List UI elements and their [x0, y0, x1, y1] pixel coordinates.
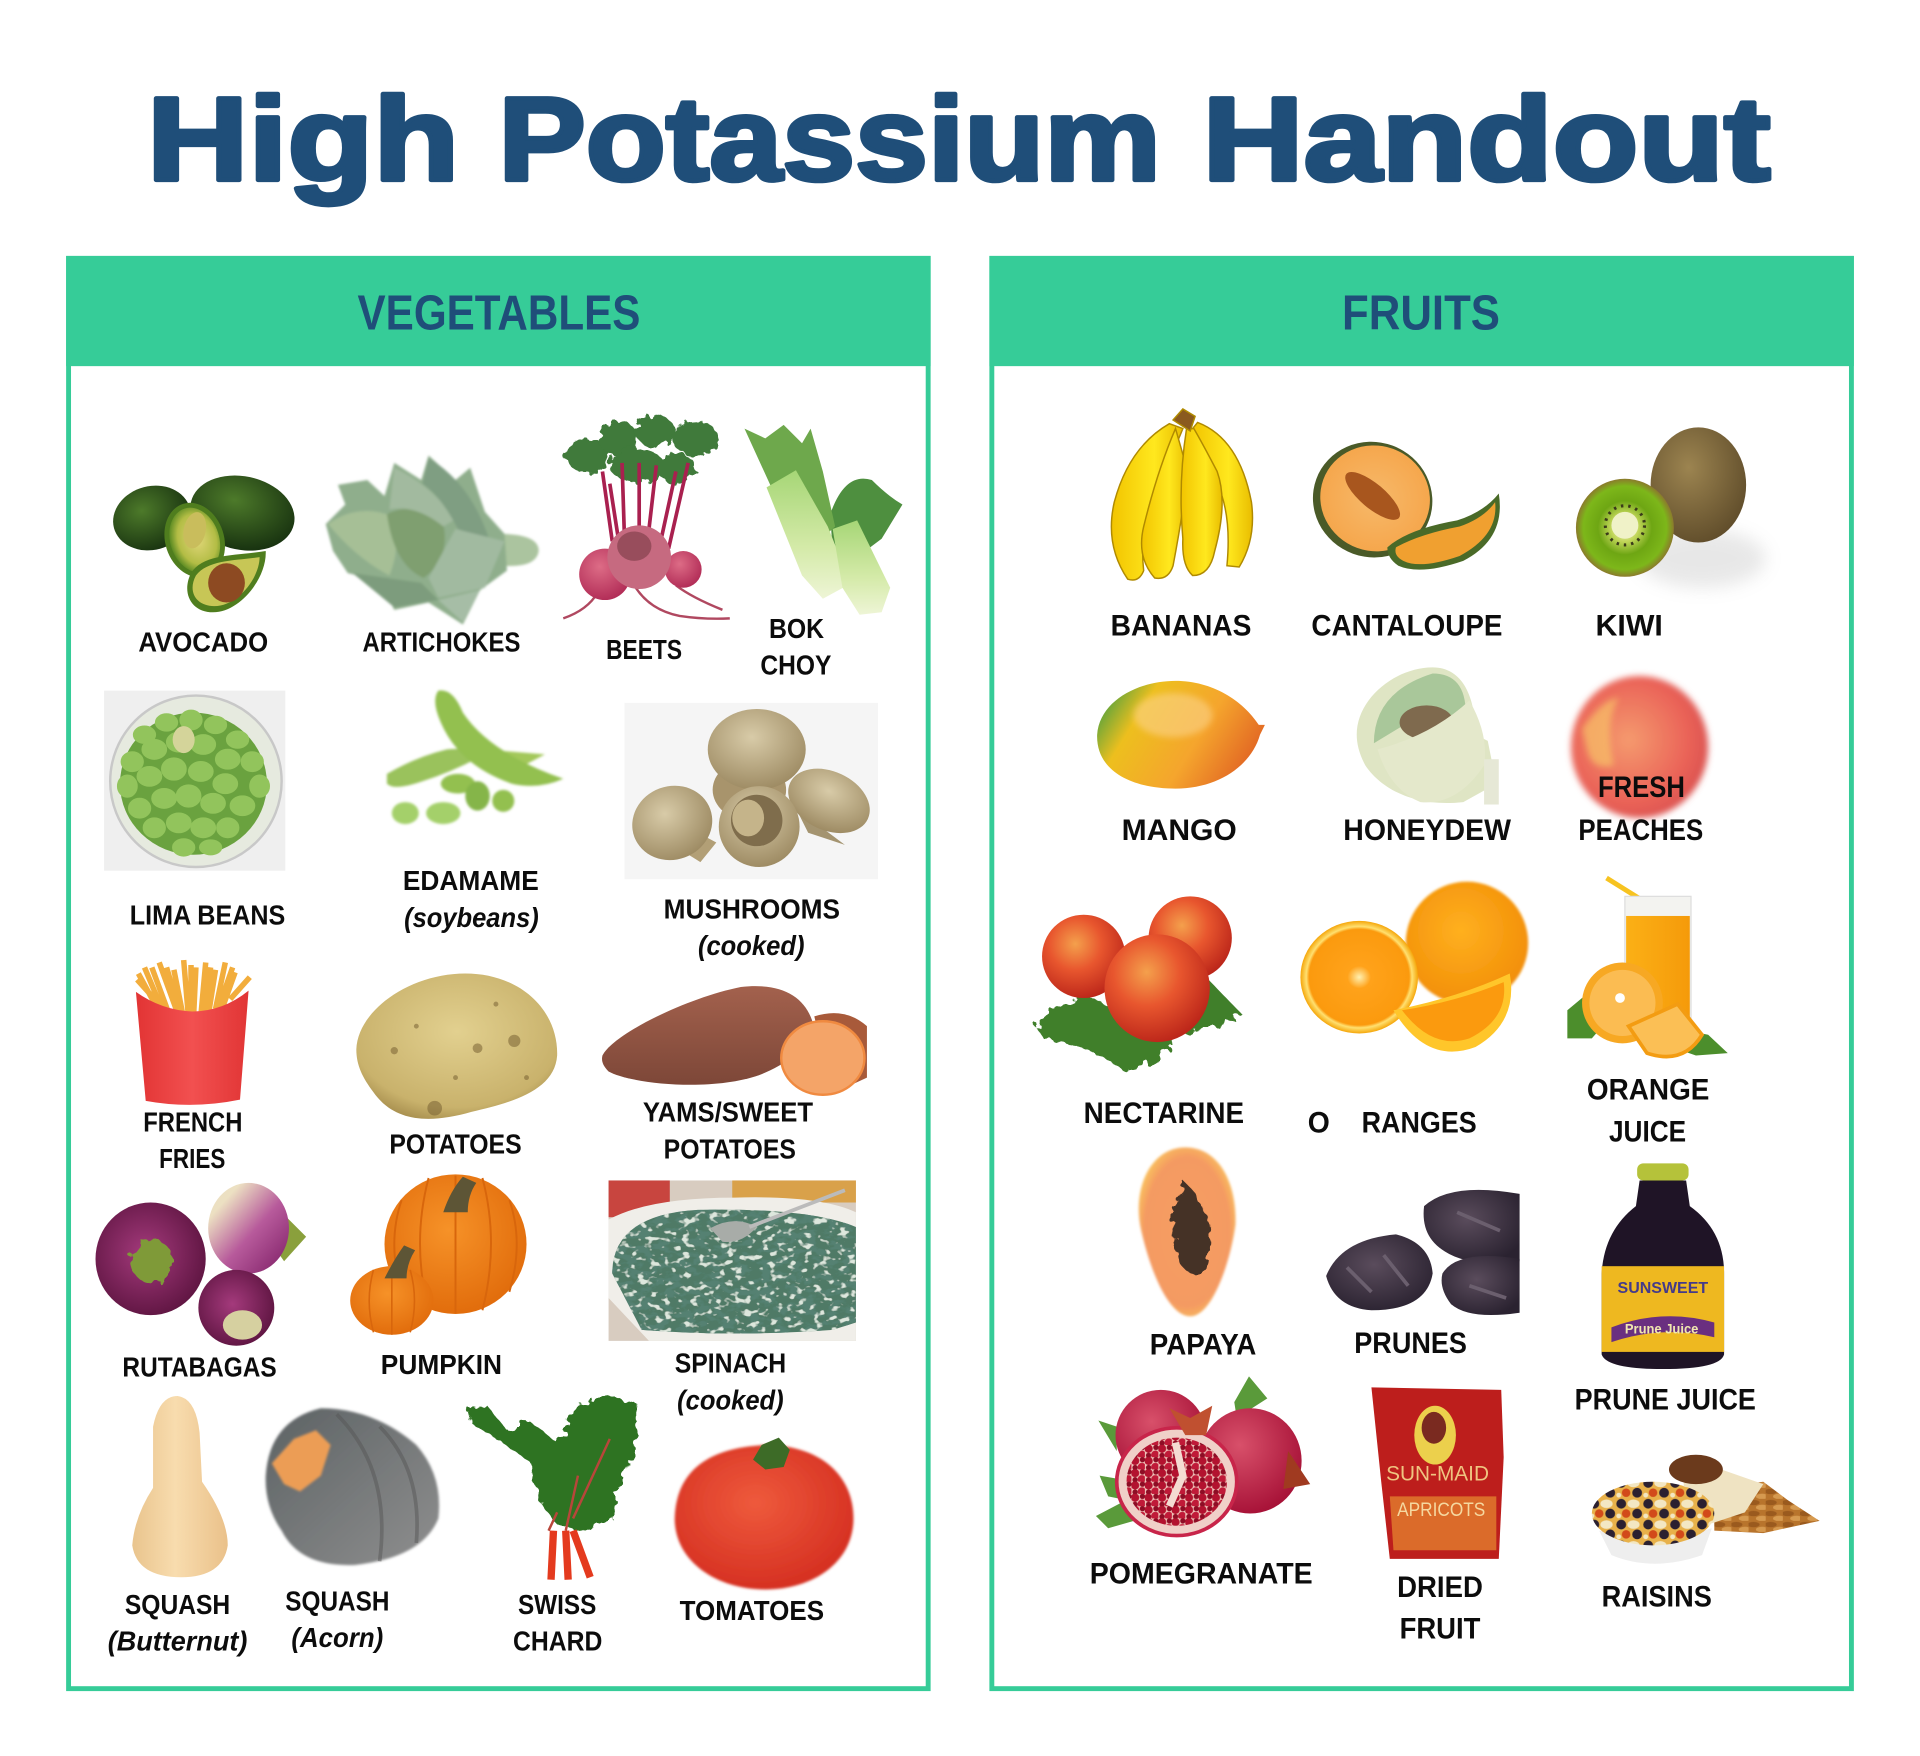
item: kiwi — [1576, 427, 1766, 643]
icon: raisins — [1592, 1455, 1820, 1564]
item: nectarine — [1035, 896, 1244, 1130]
icon: prunes — [1326, 1190, 1520, 1315]
icon: nectarine — [1035, 896, 1242, 1070]
icon: oranges — [1300, 882, 1528, 1052]
item: oranges — [1300, 882, 1528, 1140]
heading: fruits: FRUITS — [1342, 286, 1500, 340]
label: butternut squash — [108, 1589, 247, 1657]
icon: papaya — [1139, 1147, 1236, 1316]
item: spinach — [609, 1180, 856, 1415]
item: prunes — [1326, 1190, 1520, 1360]
item: pomegranate — [1090, 1376, 1313, 1590]
icon: dried fruit: SUN-MAID — [1386, 1462, 1489, 1485]
label: tomatoes: TOMATOES — [680, 1595, 824, 1626]
icon: avocado — [106, 466, 302, 612]
label: acorn squash — [285, 1585, 389, 1653]
label: kiwi: KIWI — [1596, 610, 1663, 643]
icon: french fries — [136, 960, 250, 1105]
item: french fries — [136, 960, 250, 1174]
label: avocado: AVOCADO — [138, 626, 268, 657]
icon: rutabagas — [96, 1183, 306, 1346]
item: tomatoes — [675, 1438, 853, 1626]
icon: beets — [563, 415, 730, 619]
item: mango — [1097, 681, 1265, 847]
icon: pumpkin — [350, 1174, 527, 1335]
label: oranges: O — [1308, 1107, 1330, 1140]
label: mushrooms: MUSHROOMS — [664, 893, 840, 924]
label: edamame — [403, 865, 539, 933]
label: oranges — [1308, 1107, 1477, 1140]
icon: swiss chard — [468, 1396, 637, 1580]
icon: dried fruit — [1371, 1387, 1504, 1559]
label: orange juice — [1587, 1074, 1709, 1148]
panel: fruits — [989, 256, 1854, 1689]
icon: kiwi — [1576, 427, 1766, 588]
icon: edamame — [387, 690, 563, 824]
panel frame: fruits — [992, 258, 1851, 1689]
icon: mango — [1097, 681, 1265, 789]
title: High — [147, 73, 459, 206]
label: lima beans: LIMA BEANS — [130, 900, 285, 931]
item: fresh peaches — [1571, 676, 1708, 847]
label: french fries — [143, 1106, 242, 1174]
label: fresh peaches: FRESH — [1598, 771, 1685, 804]
label: butternut squash: SQUASH — [125, 1589, 230, 1620]
title — [147, 73, 1771, 206]
icon: dried fruit: APRICOTS — [1397, 1499, 1485, 1521]
item: swiss chard — [468, 1396, 637, 1657]
label: dried fruit — [1397, 1571, 1483, 1645]
label: swiss chard — [513, 1589, 602, 1657]
label: edamame: EDAMAME — [403, 865, 539, 896]
panel header band: fruits — [989, 256, 1854, 366]
title: Handout — [1202, 73, 1771, 206]
icon: prune juice: Prune Juice — [1625, 1322, 1699, 1337]
item: lima beans — [104, 691, 285, 931]
icon: honeydew — [1357, 667, 1499, 805]
label: spinach: SPINACH — [675, 1348, 786, 1379]
item: bananas — [1111, 409, 1253, 643]
icon: acorn squash — [266, 1408, 439, 1565]
panel header band: vegetables — [66, 256, 931, 366]
icon: potatoes — [356, 974, 557, 1119]
label: bok choy — [760, 613, 831, 681]
label: honeydew: HONEYDEW — [1343, 814, 1512, 847]
item: pumpkin — [350, 1174, 527, 1380]
label: dried fruit: DRIED — [1397, 1571, 1483, 1604]
title: Potassium — [498, 73, 1161, 206]
label: raisins: RAISINS — [1602, 1581, 1712, 1614]
icon: fresh peaches — [1571, 676, 1708, 818]
label: prunes: PRUNES — [1354, 1327, 1467, 1360]
item: mushrooms — [622, 703, 880, 961]
label: cantaloupe: CANTALOUPE — [1311, 610, 1502, 643]
label: rutabagas: RUTABAGAS — [122, 1351, 277, 1382]
label: yams / sweet potatoes — [643, 1097, 813, 1164]
label: bok choy: BOK — [769, 613, 824, 644]
item: avocado — [106, 466, 302, 657]
item: potatoes — [356, 974, 557, 1160]
item: honeydew — [1343, 667, 1512, 847]
label: swiss chard: SWISS — [518, 1589, 596, 1620]
item: beets — [563, 415, 730, 665]
label: acorn squash: SQUASH — [285, 1585, 389, 1616]
icon: lima beans — [104, 691, 285, 871]
icon: bok choy — [744, 425, 902, 615]
item: orange juice — [1567, 878, 1728, 1148]
label: mushrooms — [664, 893, 840, 961]
label: edamame: (soybeans) — [404, 902, 539, 933]
label: mushrooms: (cooked) — [698, 930, 804, 961]
icon: pomegranate — [1096, 1376, 1310, 1536]
item: rutabagas — [96, 1183, 306, 1382]
label: mango: MANGO — [1122, 814, 1237, 847]
item: dried fruit — [1371, 1387, 1504, 1645]
icon: yams / sweet potatoes — [602, 986, 867, 1095]
label: fresh peaches — [1578, 771, 1703, 847]
label: bok choy: CHOY — [760, 650, 831, 681]
label: prune juice: PRUNE JUICE — [1575, 1383, 1756, 1416]
label: fresh peaches: PEACHES — [1578, 814, 1703, 847]
label: french fries: FRENCH — [143, 1106, 242, 1137]
icon: bananas — [1111, 409, 1253, 580]
label: dried fruit: FRUIT — [1400, 1612, 1480, 1645]
label: french fries: FRIES — [159, 1143, 225, 1174]
label: butternut squash: (Butternut) — [108, 1626, 247, 1657]
icon: prune juice: SUNSWEET — [1618, 1280, 1708, 1297]
label: acorn squash: (Acorn) — [291, 1622, 383, 1653]
label: nectarine: NECTARINE — [1084, 1097, 1244, 1130]
icon: mushrooms — [622, 703, 880, 879]
item: artichokes — [326, 456, 539, 657]
label: yams / sweet potatoes: YAMS/SWEET — [643, 1097, 813, 1128]
item: yams — [602, 986, 867, 1164]
label: orange juice: JUICE — [1609, 1115, 1686, 1148]
label: potatoes: POTATOES — [389, 1129, 522, 1160]
panel: vegetables — [66, 256, 931, 1689]
label: orange juice: ORANGE — [1587, 1074, 1709, 1107]
item: raisins — [1592, 1455, 1820, 1614]
icon: prune juice — [1602, 1163, 1724, 1369]
icon: tomatoes — [675, 1438, 853, 1589]
heading: vegetables: VEGETABLES — [358, 286, 640, 340]
item: cantaloupe — [1297, 425, 1502, 643]
label: pomegranate: POMEGRANATE — [1090, 1557, 1313, 1590]
item: edamame — [387, 690, 563, 933]
icon: spinach — [609, 1180, 856, 1341]
icon: orange juice — [1567, 878, 1728, 1057]
item: papaya — [1139, 1147, 1256, 1361]
item: butternut squash — [108, 1396, 247, 1657]
item: prune juice — [1575, 1163, 1756, 1416]
label: papaya: PAPAYA — [1150, 1328, 1256, 1361]
label: artichokes: ARTICHOKES — [362, 626, 520, 657]
label: spinach — [675, 1348, 786, 1415]
label: beets: BEETS — [606, 634, 682, 665]
panel frame: vegetables — [69, 258, 928, 1689]
label: oranges: RANGES — [1362, 1107, 1477, 1140]
label: swiss chard: CHARD — [513, 1626, 602, 1657]
label: spinach: (cooked) — [677, 1384, 784, 1415]
icon: artichokes — [326, 456, 539, 625]
label: yams / sweet potatoes: POTATOES — [664, 1133, 796, 1164]
label: bananas: BANANAS — [1111, 610, 1251, 643]
label: pumpkin: PUMPKIN — [381, 1349, 502, 1380]
icon: cantaloupe — [1297, 425, 1500, 574]
item: acorn squash — [266, 1408, 439, 1653]
item: bok choy — [744, 425, 902, 681]
icon: butternut squash — [132, 1396, 228, 1577]
